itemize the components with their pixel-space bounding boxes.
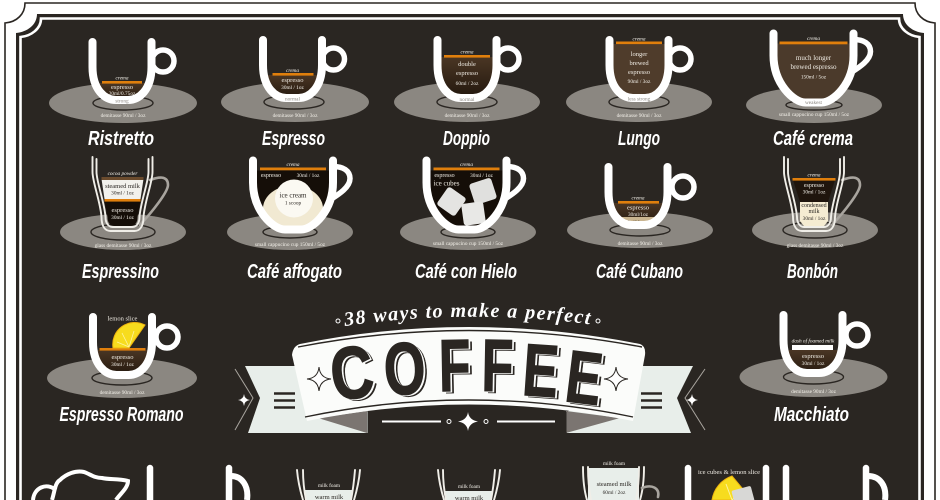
word: COFFEE: E bbox=[522, 329, 563, 414]
Espressino: espresso bbox=[111, 207, 134, 214]
Doppio: crema bbox=[460, 50, 474, 56]
bottom row: glass 3: 60ml / 2oz bbox=[603, 490, 626, 496]
Espresso Romano: demitasse 90ml / 3oz bbox=[100, 390, 145, 396]
word: COFFEE: E bbox=[563, 336, 609, 422]
title banner bbox=[234, 302, 706, 433]
word: COFFEE: C bbox=[329, 332, 382, 419]
Lungo: crema bbox=[632, 36, 646, 42]
Espressino: steamed milk bbox=[105, 183, 141, 190]
word: COFFEE: O bbox=[384, 327, 429, 412]
Ristretto: crema bbox=[115, 76, 129, 82]
bottom row: glass 1 bbox=[297, 470, 360, 500]
Café crema bbox=[746, 34, 882, 150]
Café affogato: crema bbox=[286, 162, 300, 168]
bottom ornament bbox=[382, 412, 555, 431]
Café crema: Café crema bbox=[773, 128, 853, 150]
ribbon tails bbox=[235, 366, 705, 433]
Espresso Romano: 30ml / 1oz bbox=[111, 362, 134, 368]
Macchiato bbox=[740, 315, 888, 426]
Espressino: 30ml / 1oz bbox=[111, 215, 134, 221]
Bonbón: condensed bbox=[801, 203, 827, 209]
Macchiato: Macchiato bbox=[774, 404, 849, 426]
Espresso: Espresso bbox=[262, 128, 325, 150]
subtitle dots bbox=[336, 319, 600, 323]
bottom row: glass 1: milk foam bbox=[318, 482, 341, 489]
Café con Hielo: Café con Hielo bbox=[415, 261, 517, 283]
Bonbón: 30ml / 1oz bbox=[803, 216, 826, 222]
bottom row: glass 2: milk foam bbox=[458, 483, 481, 490]
bottom row: glass 3 bbox=[583, 460, 658, 500]
Macchiato: espresso bbox=[802, 353, 824, 360]
Café con Hielo: small cappucino cup 150ml / 5oz bbox=[433, 241, 504, 247]
Bonbón: 30ml / 1oz bbox=[803, 190, 826, 196]
Macchiato: demitasse 90ml / 3oz bbox=[791, 389, 837, 395]
Lungo bbox=[566, 36, 712, 150]
Espresso: demitasse 90ml / 3oz bbox=[273, 113, 318, 119]
Lungo: 90ml / 3oz bbox=[628, 79, 651, 85]
Café con Hielo: 30ml / 1oz bbox=[470, 173, 493, 179]
Doppio: 60ml / 2oz bbox=[456, 81, 479, 87]
bottom row: last cup bbox=[786, 468, 885, 500]
Café Cubano: crema bbox=[631, 196, 645, 202]
Espresso: crema bbox=[286, 68, 299, 74]
Café crema: 150ml / 5oz bbox=[801, 74, 827, 80]
Macchiato: 30ml / 1oz bbox=[802, 361, 825, 367]
bottom row: glass 3: steamed milk bbox=[597, 481, 632, 488]
Espressino: glass demitasse 90ml / 3oz bbox=[95, 243, 152, 249]
Ristretto: demitasse 90ml / 3oz bbox=[101, 113, 146, 119]
Café con Hielo: ice cubes bbox=[434, 180, 460, 188]
Lungo: brewed bbox=[629, 60, 649, 67]
Lungo: Lungo bbox=[618, 128, 660, 150]
Espresso Romano: lemon slice bbox=[108, 316, 137, 322]
Bonbón bbox=[752, 157, 878, 283]
Café crema: brewed espresso bbox=[790, 63, 837, 71]
Café Cubano bbox=[567, 167, 713, 283]
Café Cubano: Café Cubano bbox=[596, 261, 683, 283]
Café con Hielo: espresso bbox=[434, 173, 455, 179]
Espresso: 30ml / 1oz bbox=[281, 85, 304, 91]
Doppio: espresso bbox=[456, 70, 478, 77]
Espresso bbox=[221, 40, 369, 150]
Café affogato: 1 scoop bbox=[285, 200, 302, 206]
bottom row: cup with lemon and ice bbox=[688, 468, 766, 500]
Doppio: double bbox=[458, 61, 476, 68]
Café crema: small cappucino cup 150ml / 5oz bbox=[779, 112, 850, 118]
Bonbón: espresso bbox=[804, 183, 824, 189]
word: COFFEE bbox=[326, 324, 610, 423]
Café con Hielo: crema bbox=[460, 162, 473, 168]
word: COFFEE: O bbox=[382, 326, 428, 411]
Espresso Romano bbox=[47, 316, 197, 426]
word: COFFEE: F bbox=[484, 326, 517, 409]
Café Cubano: brewed with brown sugar bbox=[618, 219, 659, 224]
Lungo: demitasse 90ml / 3oz bbox=[617, 113, 662, 119]
Lungo: espresso bbox=[628, 69, 650, 76]
Café affogato: 30ml / 1oz bbox=[297, 173, 320, 179]
ribbon lines bbox=[274, 394, 662, 408]
icon: sparkles bbox=[307, 367, 628, 391]
Bonbón: glass demitasse 90ml / 3oz bbox=[787, 243, 844, 249]
Ristretto: strong bbox=[115, 98, 129, 104]
word: COFFEE: F bbox=[438, 324, 471, 407]
Bonbón: Bonbón bbox=[787, 261, 838, 283]
word: COFFEE: C bbox=[326, 330, 378, 417]
Café Cubano: espresso bbox=[627, 204, 649, 212]
Café affogato: small cappucino cup 150ml / 5oz bbox=[255, 242, 326, 248]
word: COFFEE: O bbox=[385, 328, 431, 413]
Doppio bbox=[394, 40, 540, 150]
word: COFFEE: F bbox=[483, 325, 516, 408]
word: COFFEE: E bbox=[565, 337, 610, 423]
Espresso Romano: Espresso Romano bbox=[60, 404, 184, 426]
bottom row: glass 2 bbox=[438, 470, 500, 500]
word: COFFEE: E bbox=[520, 328, 561, 413]
word: COFFEE: C bbox=[328, 331, 380, 418]
Café crema: weakest bbox=[805, 100, 823, 106]
Espressino: 30ml / 1oz bbox=[111, 190, 134, 196]
Café Cubano: 30ml/1oz bbox=[628, 212, 649, 218]
icon: lemon slice bbox=[113, 322, 145, 348]
Ristretto: 20ml/0.75oz bbox=[109, 91, 136, 97]
Espresso Romano: espresso bbox=[111, 354, 134, 361]
Café crema: crema bbox=[807, 36, 820, 42]
word: COFFEE: F bbox=[481, 324, 514, 407]
Ristretto: Ristretto bbox=[88, 128, 154, 150]
Lungo: less strong bbox=[628, 96, 651, 102]
Bonbón: milk bbox=[808, 209, 820, 215]
Espresso: espresso bbox=[281, 77, 304, 84]
Espressino: cocoa powder bbox=[108, 171, 138, 177]
bottom row: cup with lemon and ice: ice cubes & lemon slice bbox=[698, 469, 760, 476]
word: COFFEE: F bbox=[442, 326, 475, 409]
Café Cubano: demitasse 90ml / 3oz bbox=[618, 241, 663, 247]
Café crema: much longer bbox=[796, 54, 832, 62]
Doppio: normal bbox=[459, 97, 475, 103]
word: COFFEE: F bbox=[440, 325, 473, 408]
Espressino: Espressino bbox=[82, 261, 159, 283]
Bonbón: crema bbox=[807, 172, 821, 178]
subtitle: 38 ways to make a perfect bbox=[344, 302, 592, 326]
Café affogato bbox=[227, 160, 353, 283]
bottom row: pitcher bbox=[33, 471, 128, 500]
Espresso: normal bbox=[285, 96, 301, 102]
Café affogato: Café affogato bbox=[247, 261, 342, 283]
Café con Hielo bbox=[400, 160, 536, 283]
main banner bbox=[292, 327, 645, 421]
banner lines bbox=[298, 330, 642, 417]
icon: tail stars bbox=[238, 394, 698, 406]
Doppio: Doppio bbox=[443, 128, 490, 150]
Doppio: demitasse 90ml / 3oz bbox=[445, 113, 490, 119]
Ristretto: espresso bbox=[111, 84, 133, 91]
Café affogato: ice cream bbox=[279, 192, 307, 200]
bottom row: glass 3: milk foam bbox=[603, 460, 626, 467]
Espressino bbox=[60, 157, 186, 283]
word: COFFEE: E bbox=[524, 330, 565, 415]
Macchiato: dash of foamed milk bbox=[792, 338, 835, 344]
Café affogato: espresso bbox=[261, 173, 281, 179]
word: COFFEE: E bbox=[561, 335, 607, 421]
Ristretto bbox=[49, 42, 197, 150]
Lungo: longer bbox=[631, 51, 648, 58]
bottom row: cup 1 bbox=[150, 468, 247, 500]
